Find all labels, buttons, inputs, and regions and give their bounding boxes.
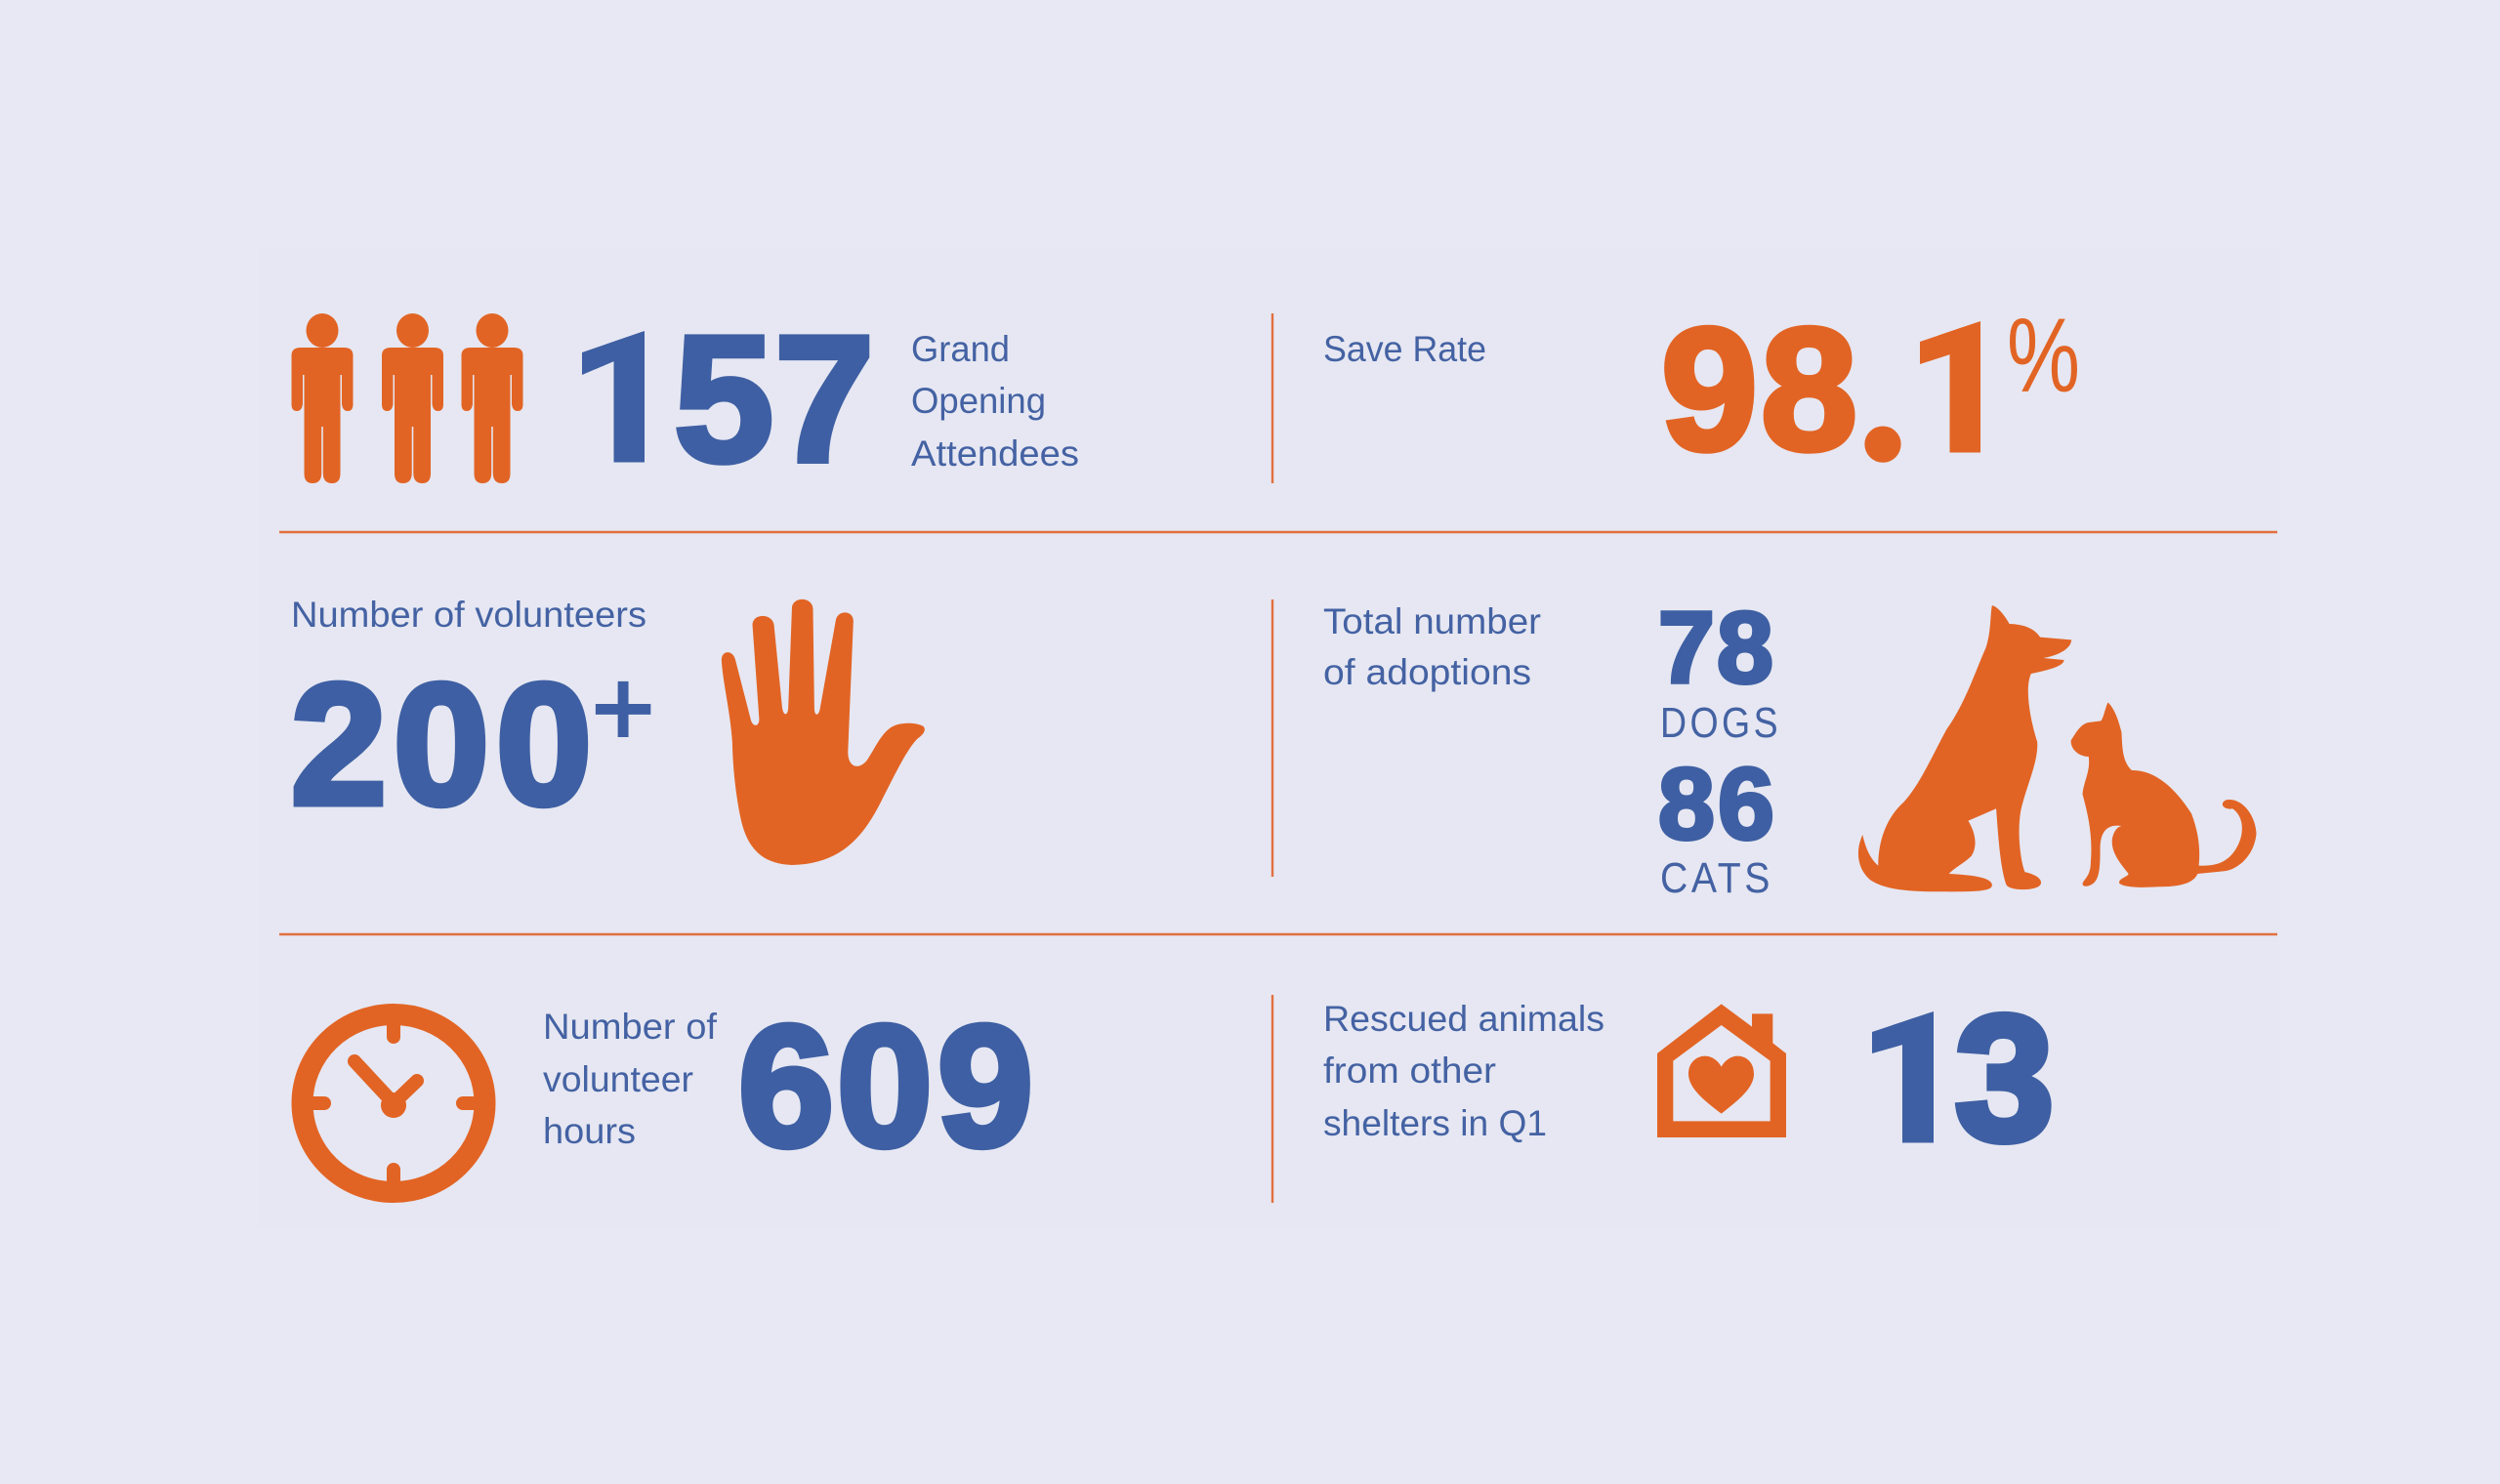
panel: save rate [1324,318,2077,463]
panel: volunteer hours [303,991,1033,1192]
number: 13: 3 [1955,978,2054,1177]
label: rescued animals from other shelters in Q1 [1323,999,1604,1143]
panel: background card [258,248,2279,1228]
number: 13: 1 [1864,1004,1962,1164]
icon: raised hand [722,599,925,865]
number: 13 [1872,1011,2052,1145]
label: number of volunteer hours: volunteer [543,1059,693,1099]
icon: three people [291,313,523,483]
number: 98.1: 1 [1911,313,2009,474]
label: grand opening attendees: Opening [911,381,1046,421]
label: number of volunteers: Number of volunteers [291,595,646,635]
number: 98.1: 98 [1661,292,1857,486]
label: number of volunteer hours: hours [543,1111,636,1151]
label: rescued animals from other shelters in Q1: shelters in Q1 [1323,1103,1547,1143]
label: save rate: Save Rate [1323,329,1486,369]
label: total number of adoptions: Total number [1323,601,1541,641]
number: 86 cats: CATS [1660,854,1773,902]
label: total number of adoptions [1323,601,1541,692]
icon: dog and cat [1858,605,2257,891]
label: number of volunteer hours: Number of [543,1007,718,1047]
label: grand opening attendees: Attendees [911,433,1079,474]
icon: clock [303,1014,484,1192]
panel: volunteers [291,595,925,865]
icon: house with heart [1657,1004,1786,1137]
number: 157 [582,331,869,466]
label: number of volunteer hours [543,1007,718,1151]
number: 78 dogs: 78 [1658,592,1773,705]
number: 98.1 [1664,321,1980,463]
number: 157: 57 [674,298,874,499]
panel: adoptions [1323,592,2257,902]
plus sign: + [592,648,654,768]
percent sign: % [2007,296,2080,414]
label: rescued animals from other shelters in Q1: Rescued animals [1323,999,1604,1039]
number: 78 dogs: DOGS [1660,699,1781,747]
label: grand opening attendees [911,329,1079,474]
number: 157: 1 [578,323,676,483]
number: 609: 609 [738,991,1033,1182]
label: rescued animals from other shelters in Q1: from other [1323,1051,1496,1091]
number: 98.1: . [1857,310,1906,471]
number: 86 cats: 86 [1658,748,1774,861]
label: grand opening attendees: Grand [911,329,1010,369]
number: 78 dogs [1658,592,1781,747]
number: 200: 200 [291,649,592,841]
label: total number of adoptions: of adoptions [1323,652,1531,692]
panel: rescued animals [1324,1004,2052,1145]
panel: grand opening attendees [291,313,1078,483]
